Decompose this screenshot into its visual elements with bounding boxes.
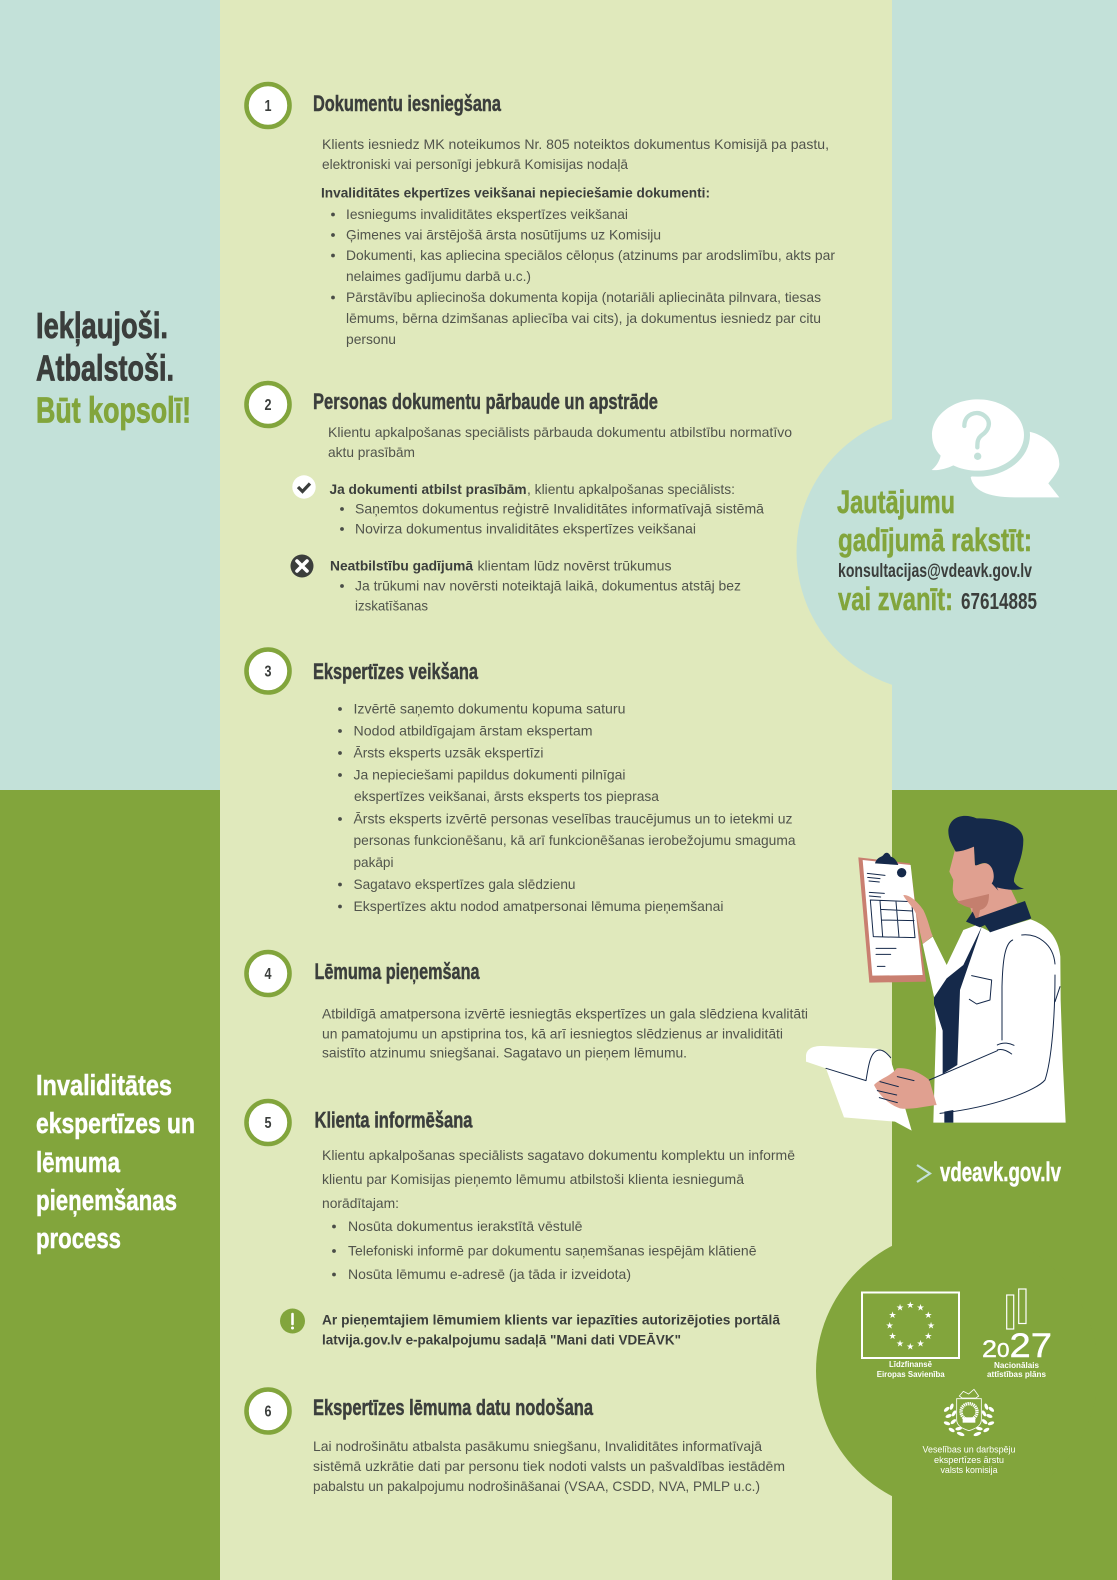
icon: cross mark: [290, 554, 314, 578]
step 6 heading: Ekspertīzes lēmuma datu nodošana: [313, 1395, 594, 1420]
step 2 number badge: 2: [264, 397, 272, 414]
background: right green panel: [892, 790, 1117, 1580]
contact text: Jautājumu: [837, 484, 955, 520]
compliant case text: [330, 481, 764, 536]
logo: 2027 national plan: attīstības plāns: [987, 1370, 1047, 1379]
step 3 list: Ekspertīzes aktu nodod amatpersonai lēmuma pieņemšanai: [354, 898, 724, 914]
step 2 number badge: [246, 383, 290, 426]
contact text: [837, 484, 1037, 617]
compliant case text: Ja dokumenti atbilst prasībām: [330, 481, 526, 497]
shirt: [934, 926, 982, 1123]
step 6 text: pabalstu un pakalpojumu nodrošināšanai (VSAA, CSDD, NVA, PMLP u.c.): [313, 1478, 760, 1494]
coat lines: [929, 935, 1060, 1113]
website link: [917, 1157, 1061, 1187]
step 2 heading: Personas dokumentu pārbaude un apstrāde: [313, 389, 658, 414]
step 1 documents list: personu: [346, 331, 396, 347]
callout: portal notice: latvija.gov.lv e-pakalpojumu sadaļā "Mani dati VDEĀVK": [322, 1332, 681, 1348]
contact semicircle: [796, 412, 1076, 692]
step 4 text: un pamatojumu un apstiprina tos, kā arī iesniegtos slēdzienus ar invaliditāti: [322, 1026, 783, 1042]
step 3 list: Izvērtē saņemto dokumentu kopuma saturu: [354, 700, 626, 716]
step 1 documents list: Iesniegums invaliditātes ekspertīzes veikšanai: [346, 206, 628, 222]
step 1 documents list: Pārstāvību apliecinoša dokumenta kopija (notariāli apliecināta pilnvara, tiesas: [346, 289, 821, 305]
contact text: vai zvanīt:: [838, 581, 953, 617]
title: slogan: Atbalstoši.: [36, 348, 174, 388]
logo: EU flag: ★: [906, 1342, 914, 1352]
logos semicircle: [816, 1230, 1098, 1512]
clipboard: [858, 857, 926, 983]
step 1 documents list: Ģimenes vai ārstējošā ārsta nosūtījums uz Komisiju: [346, 226, 661, 242]
step 5 number badge: 5: [264, 1115, 272, 1132]
raised hand: [903, 895, 933, 944]
step 4 text: Atbildīgā amatpersona izvērtē iesniegtās ekspertīzes un gala slēdziena kvalitāti: [322, 1006, 808, 1022]
callout: portal notice: Ar pieņemtajiem lēmumiem klients var iepazīties autorizējoties portālā: [322, 1312, 780, 1328]
step 1 number badge: 1: [264, 98, 272, 115]
logo: EU flag: Līdzfinansē: [889, 1360, 933, 1369]
step 5 list: Nosūta lēmumu e-adresē (ja tāda ir izveidota): [348, 1266, 631, 1282]
non-compliant case text: izskatīšanas: [355, 598, 428, 614]
step 1 intro text: elektroniski vai personīgi jebkurā Komisijas nodaļā: [322, 156, 628, 172]
contact text: 67614885: [961, 588, 1037, 614]
step 6 number badge: 6: [264, 1404, 272, 1420]
step 6 number badge: [246, 1390, 290, 1432]
logo: EU flag: ★: [916, 1340, 925, 1350]
step 1 documents list: nelaimes gadījumu darbā u.c.): [346, 268, 531, 284]
logo: EU flag: ★: [888, 1332, 897, 1342]
collar: [966, 901, 1031, 932]
organisation name: [922, 1444, 1016, 1475]
website link: vdeavk.gov.lv: [940, 1157, 1061, 1187]
compliant case text: Novirza dokumentus invaliditātes ekspertīzes veikšanai: [355, 520, 696, 536]
step 4 number badge: 4: [264, 966, 272, 983]
step 3 list: Sagatavo ekspertīzes gala slēdzienu: [354, 876, 576, 892]
step 5 text: klientu par Komisijas pieņemto lēmumu atbilstoši klienta iesniegumā: [322, 1171, 744, 1187]
step 1 heading: Dokumentu iesniegšana: [313, 91, 502, 116]
step 2 intro text: [328, 424, 792, 460]
step 3 list: Nodod atbildīgajam ārstam ekspertam: [354, 722, 592, 738]
step 5 text: norādītajam:: [322, 1195, 399, 1211]
title: process name: Invaliditātes: [36, 1070, 172, 1102]
logo: 2027 national plan: [982, 1289, 1052, 1379]
title: process name: lēmuma: [36, 1147, 121, 1179]
step 4 text: [322, 1006, 808, 1060]
step 1 number badge: [246, 84, 290, 127]
step 4 heading: Lēmuma pieņemšana: [314, 959, 480, 984]
background: right blue panel: [892, 0, 1117, 790]
step 6 text: sistēmā uzkrātie dati par personu tiek nodoti valsts un pašvaldības iestādēm: [313, 1458, 785, 1474]
step 5 list: Nosūta dokumentus ierakstītā vēstulē: [348, 1218, 583, 1234]
step 3 list: Ja nepieciešami papildus dokumenti pilnīgai: [354, 766, 626, 782]
step 3 number badge: 3: [264, 664, 272, 680]
non-compliant case text: [330, 558, 741, 614]
step 5 heading: Klienta informēšana: [314, 1108, 473, 1132]
non-compliant case text: klientam lūdz novērst trūkumus: [478, 558, 672, 574]
title: process name: [36, 1070, 195, 1255]
compliant case text: Saņemtos dokumentus reģistrē Invaliditātes informatīvajā sistēmā: [355, 500, 764, 516]
step 1 documents list: Dokumenti, kas apliecina speciālos cēloņus (atzinums par arodslimību, akts par: [346, 247, 835, 263]
icon: question speech bubbles: [926, 393, 1059, 497]
logo: EU flag: [862, 1292, 959, 1379]
non-compliant case text: Ja trūkumi nav novērsti noteiktajā laikā, dokumentus atstāj bez: [355, 578, 741, 594]
background: left blue panel: [0, 0, 220, 790]
title: process name: ekspertīzes un: [36, 1108, 195, 1140]
logo: EU flag: ★: [927, 1322, 935, 1332]
illustration: doctor with clipboard: [806, 816, 1066, 1131]
step 3 list: pakāpi: [354, 854, 394, 870]
step 3 heading: Ekspertīzes veikšana: [313, 659, 479, 684]
step 2 intro text: aktu prasībām: [328, 444, 415, 460]
logo: EU flag: ★: [916, 1304, 925, 1314]
icon: check mark: [292, 475, 316, 499]
step 5 text: Klientu apkalpošanas speciālists sagatavo dokumentu komplektu un informē: [322, 1147, 795, 1163]
title: slogan: [36, 305, 191, 430]
compliant case text: , klientu apkalpošanas speciālists:: [527, 481, 735, 497]
paper sheet: [806, 1046, 912, 1131]
logo: EU flag: ★: [888, 1311, 897, 1321]
step 3 list: personas funkcionēšanu, kā arī funkcionēšanas ierobežojumu smaguma: [354, 832, 796, 848]
logo: Latvian coat of arms: [943, 1389, 995, 1437]
step 3 number badge: [246, 650, 290, 692]
logo: EU flag: ★: [896, 1304, 904, 1314]
logo: EU flag: ★: [924, 1311, 932, 1321]
logo: 2027 national plan: Nacionālais: [994, 1361, 1040, 1370]
logo: EU flag: ★: [906, 1301, 914, 1311]
background: left green panel: [0, 790, 220, 1580]
logo: EU flag: ★: [896, 1340, 904, 1350]
step 5 text: [322, 1147, 795, 1211]
lower hand: [874, 1068, 937, 1109]
neck and face: [949, 843, 1017, 926]
logo: 2027 national plan: 2027: [982, 1327, 1052, 1365]
callout: portal notice: [322, 1312, 780, 1348]
step 3 list: [338, 700, 796, 914]
non-compliant case text: Neatbilstību gadījumā: [330, 558, 473, 574]
step 4 number badge: [246, 952, 290, 995]
step 1 documents subheading: Invaliditātes ekpertīzes veikšanai nepieciešamie dokumenti:: [321, 184, 710, 200]
hair: [948, 816, 1024, 891]
background: central light panel: [220, 0, 892, 1580]
step 5 list: [332, 1218, 757, 1282]
step 1 documents list: [331, 206, 835, 347]
organisation name: valsts komisija: [940, 1465, 998, 1475]
step 6 text: [313, 1438, 785, 1494]
step 2 intro text: Klientu apkalpošanas speciālists pārbauda dokumentu atbilstību normatīvo: [328, 424, 792, 440]
logo: EU flag: ★: [886, 1322, 894, 1332]
organisation name: Veselības un darbspēju: [922, 1444, 1016, 1454]
step 5 list: Telefoniski informē par dokumentu saņemšanas iespējām klātienē: [348, 1242, 757, 1258]
coat: [923, 919, 1066, 1123]
step 1 intro text: Klients iesniedz MK noteikumos Nr. 805 noteiktos dokumentus Komisijā pa pastu,: [322, 136, 829, 152]
step 6 text: Lai nodrošinātu atbalsta pasākumu sniegšanu, Invaliditātes informatīvajā: [313, 1438, 762, 1454]
icon: exclamation mark: [280, 1308, 305, 1334]
step 3 list: ekspertīzes veikšanai, ārsts eksperts tos pieprasa: [354, 788, 659, 804]
step 3 list: Ārsts eksperts izvērtē personas veselības traucējumus un to ietekmi uz: [354, 810, 792, 826]
step 4 text: saistīto atzinumu sniegšanai. Sagatavo un pieņem lēmumu.: [322, 1044, 687, 1060]
logo: EU flag: ★: [924, 1332, 932, 1342]
title: process name: pieņemšanas: [36, 1185, 177, 1217]
step 1 documents list: lēmums, bērna dzimšanas apliecība vai cits), ja dokumentus iesniedz par citu: [346, 310, 821, 326]
step 3 list: Ārsts eksperts uzsāk ekspertīzi: [354, 744, 544, 760]
step 1 intro text: [322, 136, 829, 172]
title: slogan: Būt kopsolī!: [36, 390, 191, 430]
title: process name: process: [36, 1223, 121, 1255]
logo: EU flag: Eiropas Savienība: [877, 1370, 945, 1379]
contact text: konsultacijas@vdeavk.gov.lv: [838, 561, 1032, 582]
title: slogan: Iekļaujoši.: [36, 305, 168, 346]
step 5 number badge: [246, 1101, 290, 1144]
organisation name: ekspertīzes ārstu: [934, 1455, 1004, 1465]
contact text: gadījumā rakstīt:: [838, 522, 1032, 558]
